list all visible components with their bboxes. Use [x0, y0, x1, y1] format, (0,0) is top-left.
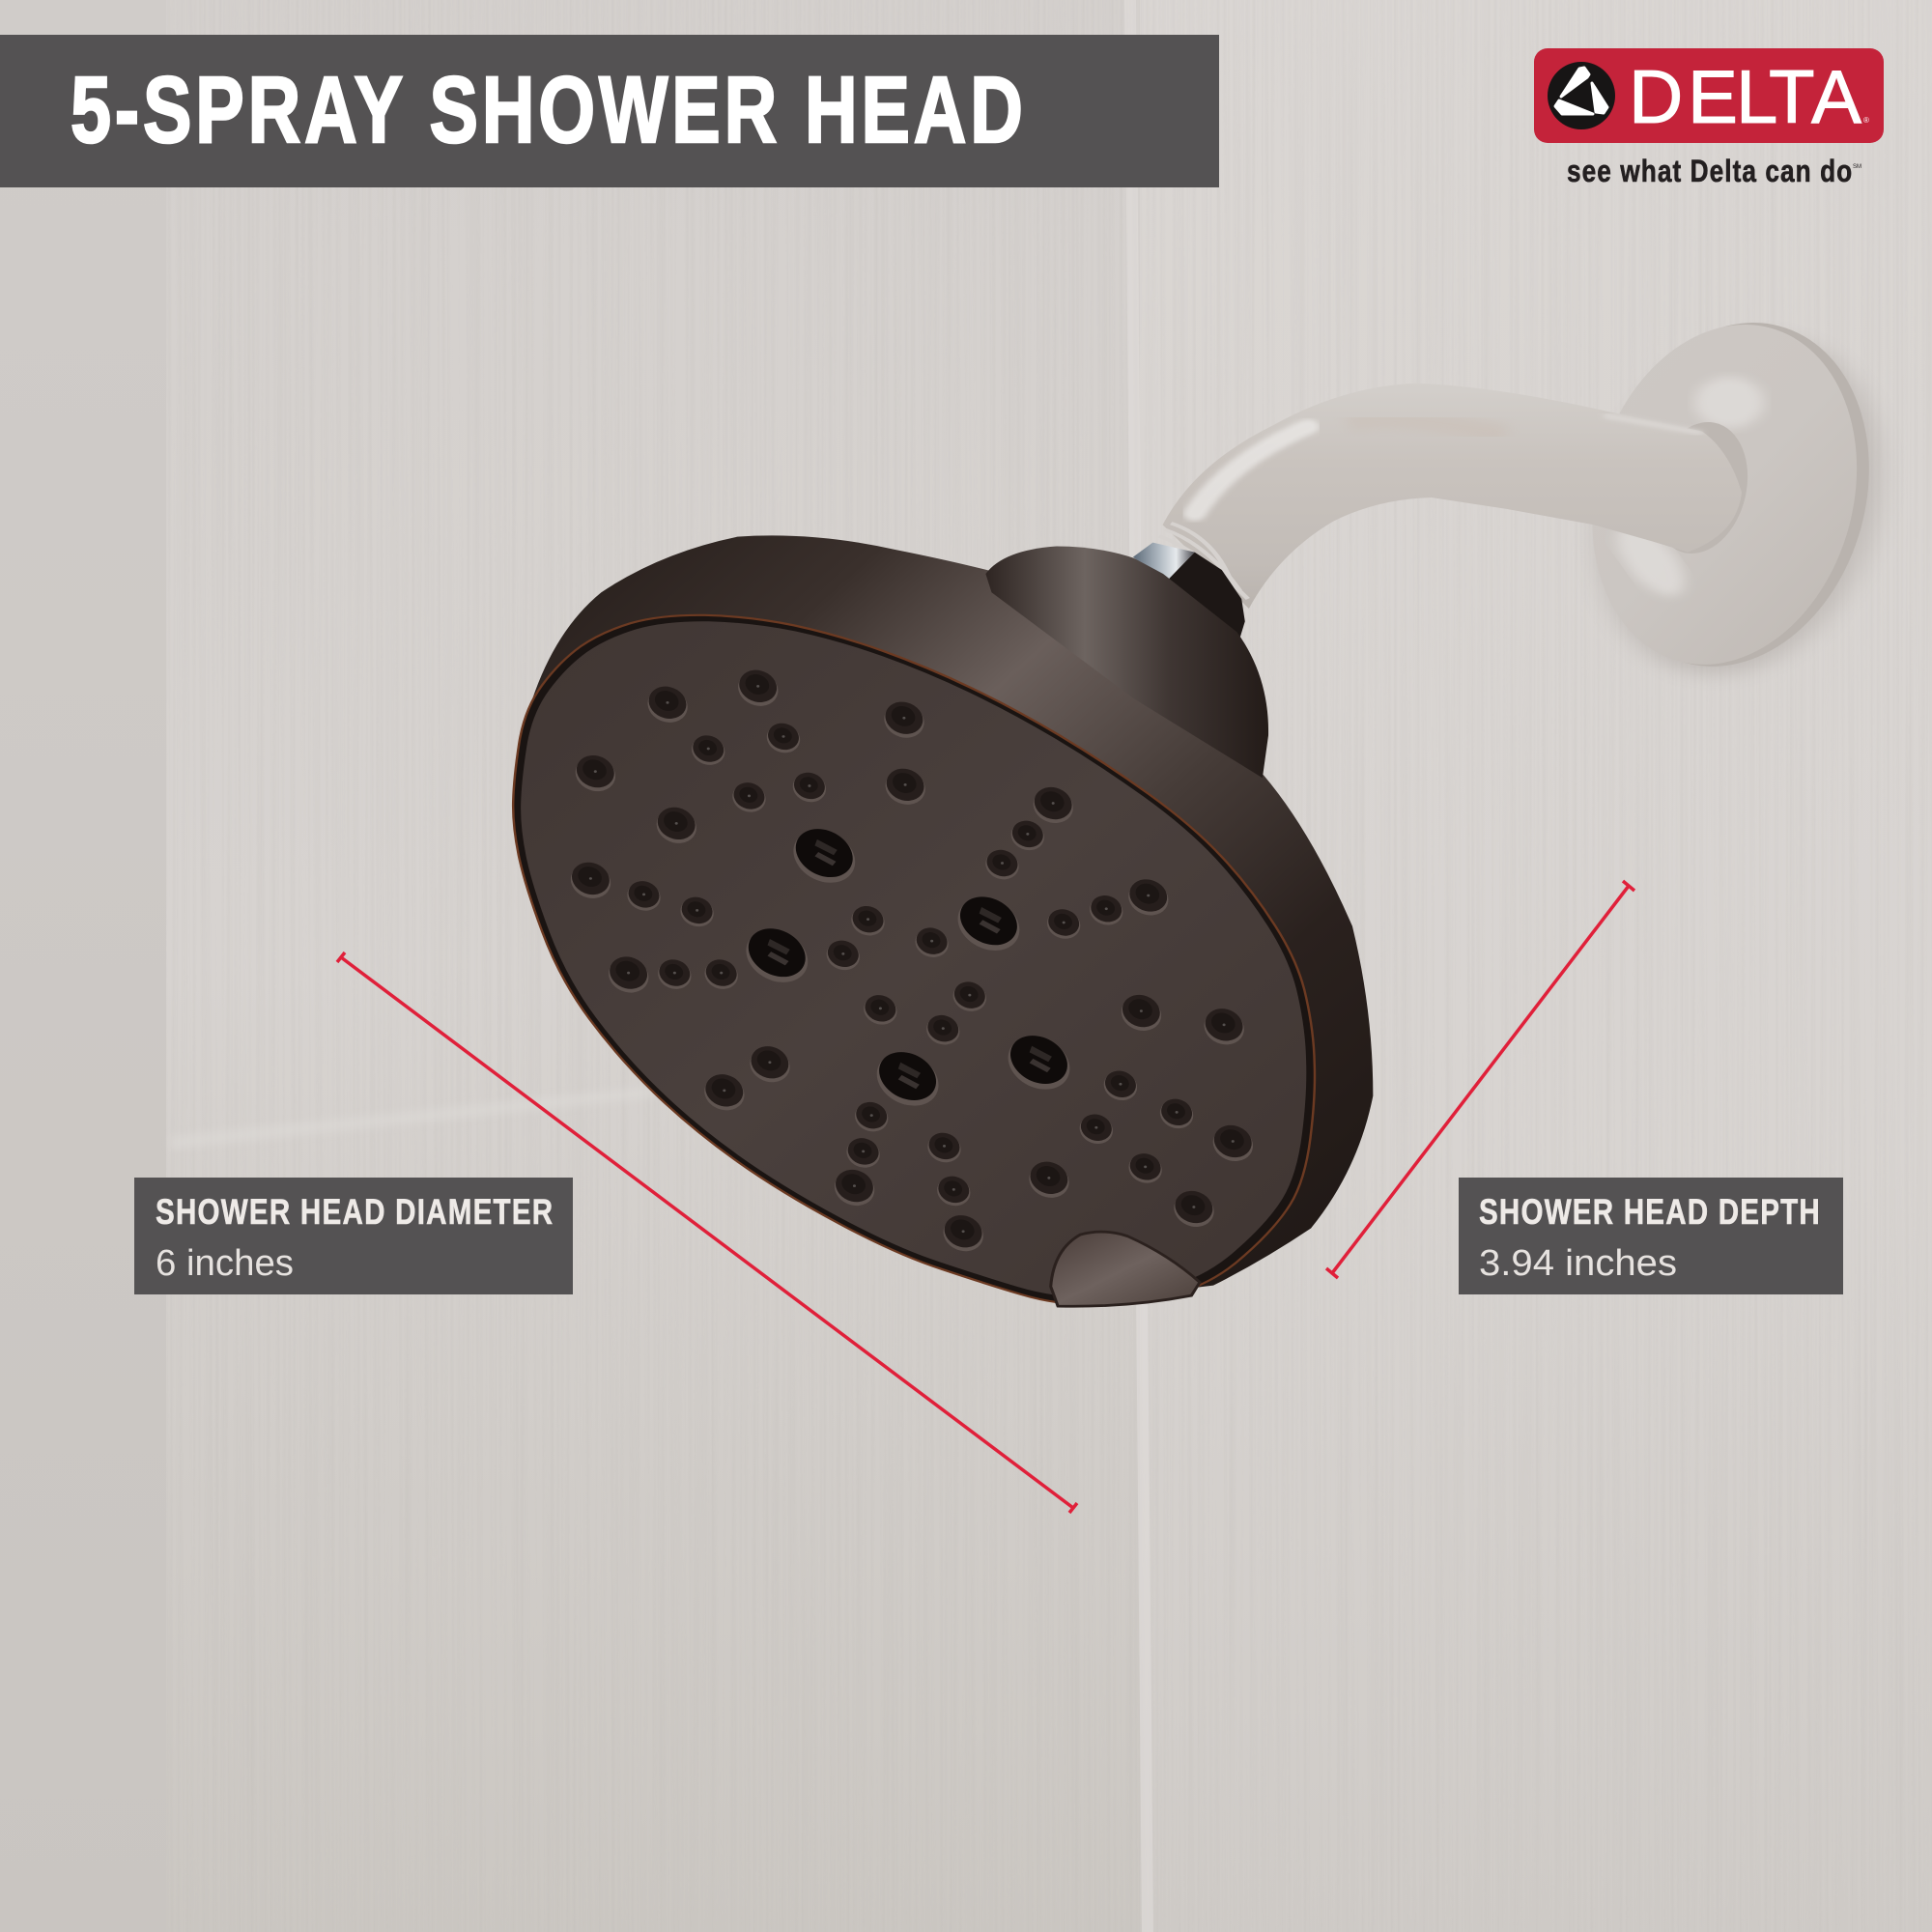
- dimension line: depth: [1326, 881, 1634, 1278]
- neck: [985, 547, 1268, 778]
- title band: [0, 35, 1219, 187]
- spray selector tab: [1051, 1232, 1200, 1306]
- icon: Delta tri-blade mark: [1548, 62, 1615, 129]
- callout heading: SHOWER HEAD DIAMETER: [156, 1193, 553, 1233]
- registered mark: ®: [1863, 116, 1869, 125]
- service mark: SM: [1853, 164, 1861, 170]
- tagline: see what Delta can do: [1567, 156, 1852, 189]
- dimension line: diameter: [337, 952, 1077, 1513]
- shower arm and wall flange: [1133, 314, 1913, 687]
- flange shadow: [1566, 324, 1913, 687]
- callout heading: SHOWER HEAD DEPTH: [1479, 1193, 1820, 1233]
- chrome nut and collar: [1133, 543, 1245, 638]
- wordmark: DELTA: [1629, 54, 1861, 139]
- callout value: 3.94 inches: [1479, 1243, 1677, 1284]
- callout: shower head diameter: [134, 1178, 573, 1294]
- arm threads: [1159, 524, 1248, 599]
- callout: shower head depth: [1459, 1178, 1843, 1294]
- callout value: 6 inches: [156, 1243, 294, 1284]
- large jets: [734, 819, 1081, 1117]
- head body casing: [516, 535, 1373, 1302]
- wall flange: [1568, 314, 1893, 675]
- nozzles small: [621, 718, 1200, 1211]
- nozzles large: [563, 664, 1261, 1258]
- shower head: [513, 535, 1373, 1306]
- curved arm: [1163, 384, 1742, 609]
- Delta logo: [1534, 48, 1884, 189]
- title: 5-SPRAY SHOWER HEAD: [71, 58, 1023, 162]
- face plate: [513, 615, 1315, 1305]
